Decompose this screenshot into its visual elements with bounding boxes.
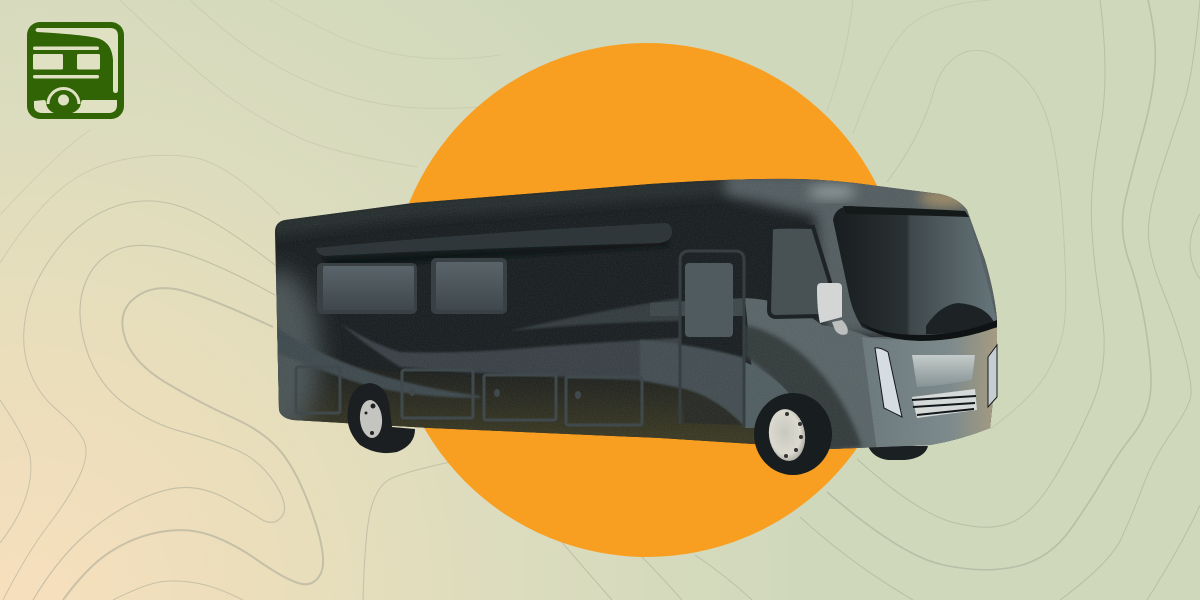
awning [316,223,672,268]
entry door [680,251,744,427]
front cap [862,327,1000,452]
fine grain texture [270,170,1005,460]
rear wheel [348,383,415,453]
panel left of door [640,340,745,427]
cab side window [769,227,830,317]
motorhome illustration [236,170,1005,475]
rear gray fade [276,260,332,421]
front hood panel [912,355,975,387]
icon: green camper trailer badge [27,22,124,119]
side mirror [817,283,848,335]
side panel under swoosh [745,362,790,428]
band across door [650,298,745,316]
roof tan tint [919,189,971,207]
compartment latches [409,388,581,399]
bus body [275,178,997,449]
front side body [745,298,1000,455]
right headlight [988,345,997,407]
side windows [317,258,507,314]
storage compartment doors [296,367,642,425]
windshield [833,206,997,341]
grille [912,389,977,418]
rear light stripe [277,328,480,399]
dark swoosh above wheel [745,325,862,452]
roof band shading [270,175,760,236]
roof highlight [808,185,856,199]
lower storage panel band [277,334,756,444]
roof and pillar gray [725,172,1005,335]
orange circle [390,43,904,557]
front under-bumper shadow [868,446,928,460]
upper thin swoosh [510,298,680,331]
left headlight [875,348,902,417]
main sweeping stripe [340,323,680,382]
front wheel [754,393,832,475]
